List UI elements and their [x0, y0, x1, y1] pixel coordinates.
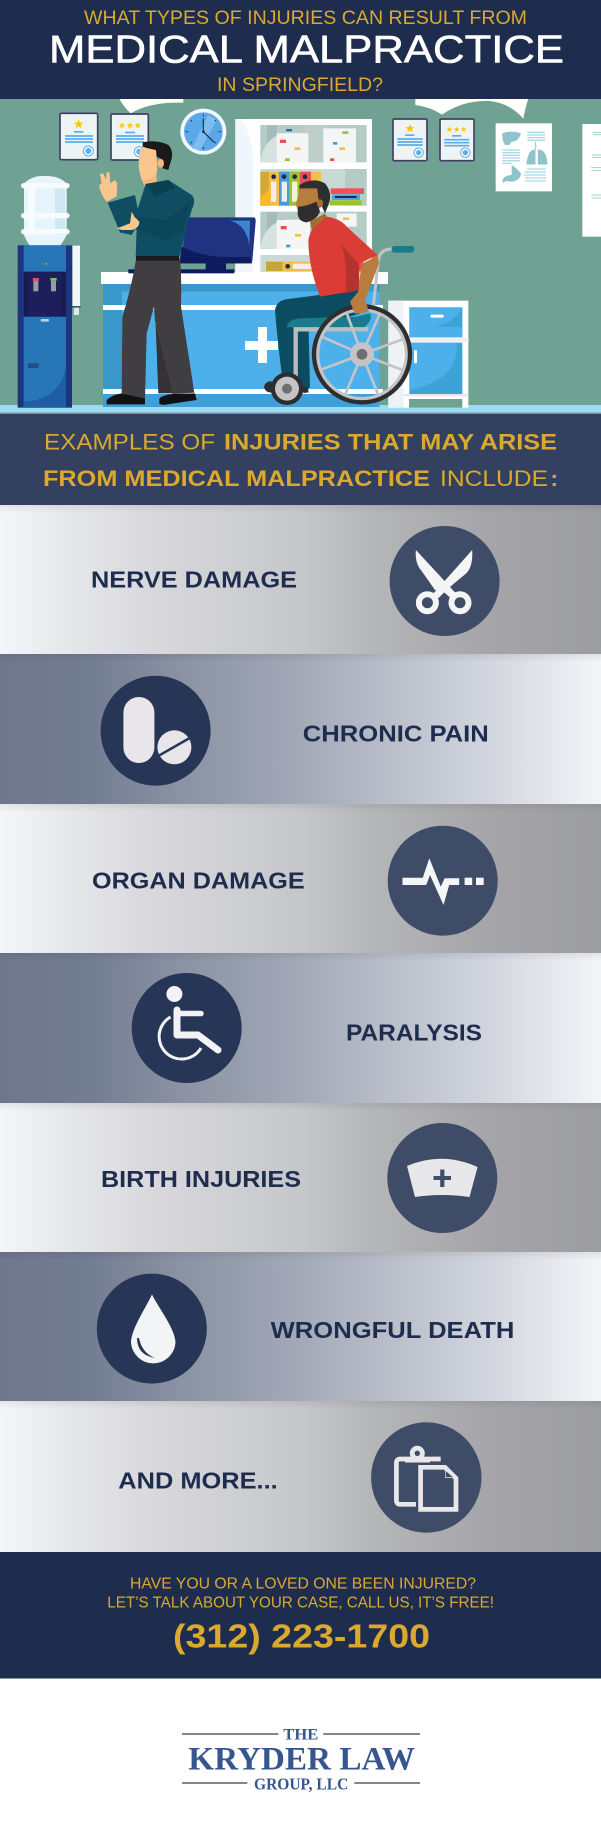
panel: paralysis: [0, 953, 601, 1103]
heading line one: INJURIES THAT MAY ARISE: [224, 430, 557, 454]
panel: call to action: [0, 1552, 601, 1678]
heading line two: [43, 466, 558, 491]
anatomy poster: [496, 123, 552, 191]
man standing: [99, 141, 197, 405]
label: AND MORE...: [118, 1467, 278, 1493]
label: BIRTH INJURIES: [101, 1166, 301, 1192]
heading line one: EXAMPLES OF: [44, 430, 215, 454]
icon: pulse: [388, 826, 498, 936]
label: ORGAN DAMAGE: [92, 867, 305, 893]
certificate 3: [393, 119, 427, 161]
main title: MEDICAL MALPRACTICE: [49, 29, 564, 72]
icon: scissors: [390, 526, 500, 636]
heading line 1: WHAT TYPES OF INJURIES CAN RESULT FROM: [84, 7, 527, 29]
small wheel: [264, 372, 308, 405]
logo: The Kryder Law Group: [182, 1726, 420, 1793]
icon: clipboard: [371, 1422, 481, 1533]
shelving cabinet: [235, 119, 372, 276]
panel: birth injuries: [0, 1103, 601, 1252]
panel: and more: [0, 1401, 601, 1552]
panel: examples heading: [0, 414, 601, 505]
side cabinet: [388, 301, 469, 408]
logo: The Kryder Law Group: THE: [283, 1726, 318, 1743]
phone number: (312) 223-1700: [173, 1618, 430, 1655]
right poster: [582, 124, 601, 237]
large wheel: [314, 306, 410, 402]
icon: nurse cap: [387, 1123, 497, 1233]
label: CHRONIC PAIN: [303, 720, 489, 746]
computer monitor: [128, 217, 256, 273]
heading line two: :: [550, 466, 558, 491]
text: question: HAVE YOU OR A LOVED ONE BEEN INJURED?: [130, 1575, 476, 1592]
man in wheelchair: [264, 180, 414, 405]
wall swooshes, cabinet, posters, right: [235, 99, 601, 408]
icon: pills: [101, 676, 211, 786]
panel: wrongful death: [0, 1252, 601, 1401]
logo: The Kryder Law Group: GROUP, LLC: [254, 1774, 348, 1793]
certificate 4: [440, 119, 474, 161]
water cooler: [18, 176, 81, 408]
icon: wheelchair: [132, 973, 242, 1083]
header panel: [0, 0, 601, 99]
heading line two: INCLUDE: [440, 466, 548, 491]
heading line one: [44, 430, 557, 454]
logo: The Kryder Law Group: KRYDER LAW: [188, 1741, 415, 1777]
label: WRONGFUL DEATH: [271, 1317, 514, 1343]
label: PARALYSIS: [346, 1020, 482, 1046]
certificate 2: [111, 114, 148, 160]
heading line two: FROM MEDICAL MALPRACTICE: [43, 466, 430, 491]
panel: chronic pain: [0, 654, 601, 804]
reception counter: [101, 272, 388, 407]
illustration: clinic scene: [0, 99, 601, 414]
wall swooshes and certificates, left: [60, 99, 226, 160]
label: NERVE DAMAGE: [91, 567, 297, 593]
panel: nerve damage: [0, 505, 601, 654]
text: invitation: LET’S TALK ABOUT YOUR CASE, CALL US, IT’S FREE!: [107, 1594, 494, 1611]
certificate 1: [60, 113, 98, 160]
clock: [180, 109, 226, 155]
cross: [245, 327, 278, 363]
heading line 3: IN SPRINGFIELD?: [217, 74, 383, 96]
icon: drop: [97, 1274, 207, 1384]
panel: organ damage: [0, 804, 601, 953]
